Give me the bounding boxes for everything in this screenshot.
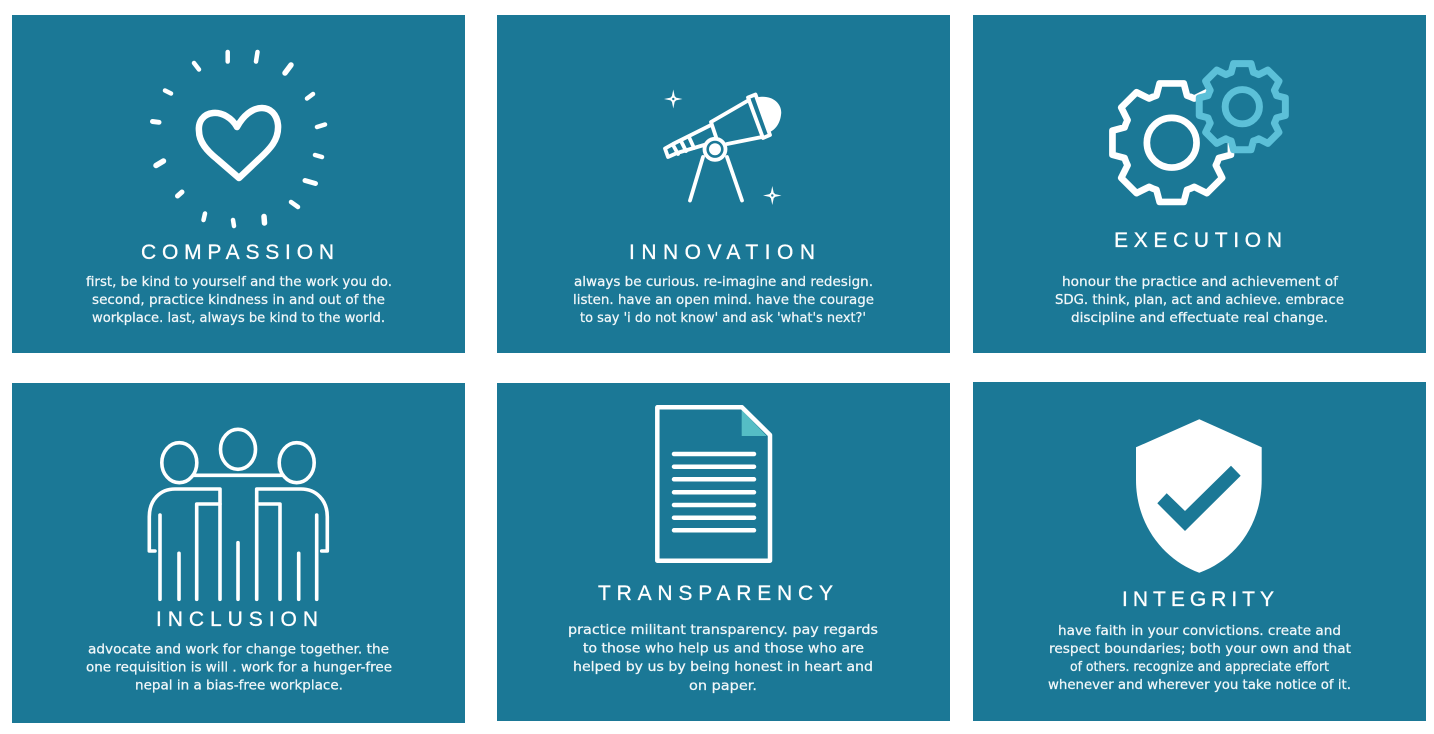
panel: integrity (973, 382, 1426, 721)
text block: execution: honour the practice and achievement of (1062, 274, 1339, 290)
icon: three people (149, 429, 327, 599)
icon: document (657, 407, 770, 561)
text block: integrity: of others. recognize and appreciate effort (1070, 659, 1329, 675)
text block: innovation: always be curious. re-imagine and redesign. (574, 274, 873, 290)
panel: innovation (497, 15, 950, 353)
panel: transparency (497, 383, 950, 721)
text block: transparency: practice militant transparency. pay regards (568, 622, 878, 638)
panel: compassion (12, 15, 465, 353)
heading: compassion: COMPASSION (141, 241, 334, 264)
text block: integrity: whenever and wherever you take notice of it. (1048, 677, 1351, 693)
text block: inclusion: nepal in a bias-free workplace. (135, 678, 343, 694)
text block: integrity (1048, 623, 1351, 693)
icon: shield with check (1136, 419, 1262, 573)
text block: compassion (86, 274, 392, 326)
panel: inclusion (12, 383, 465, 723)
heading: integrity: INTEGRITY (1122, 588, 1274, 611)
text block: compassion: workplace. last, always be kind to the world. (92, 310, 385, 326)
panel: execution (973, 15, 1426, 353)
text block: execution (1055, 274, 1344, 326)
text block: inclusion: advocate and work for change together. the (88, 642, 389, 658)
text block: execution: SDG. think, plan, act and achieve. embrace (1055, 292, 1344, 308)
heading: inclusion: INCLUSION (156, 608, 318, 631)
text block: innovation: to say 'i do not know' and ask 'what's next?' (580, 310, 866, 326)
text block: innovation: listen. have an open mind. have the courage (573, 292, 874, 308)
text block: transparency: helped by us by being honest in heart and (573, 659, 873, 675)
text block: transparency: to those who help us and those who are (583, 640, 864, 656)
heading: execution: EXECUTION (1114, 229, 1282, 252)
text block: execution: discipline and effectuate real change. (1071, 310, 1328, 326)
heading: transparency: TRANSPARENCY (598, 582, 833, 605)
text block: transparency (568, 622, 878, 694)
icon: gears (1112, 64, 1285, 202)
icon: telescope (664, 90, 782, 205)
text block: compassion: second, practice kindness in and out of the (92, 292, 385, 308)
text block: innovation (573, 274, 874, 326)
text block: transparency: on paper. (689, 678, 757, 694)
icon: heart with rays (152, 52, 325, 226)
text block: inclusion (86, 642, 392, 694)
text block: integrity: respect boundaries; both your own and that (1049, 641, 1351, 657)
text block: compassion: first, be kind to yourself and the work you do. (86, 274, 392, 290)
text block: integrity: have faith in your convictions. create and (1058, 623, 1341, 639)
text block: inclusion: one requisition is will . work for a hunger-free (86, 660, 392, 676)
heading: innovation: INNOVATION (629, 241, 815, 264)
